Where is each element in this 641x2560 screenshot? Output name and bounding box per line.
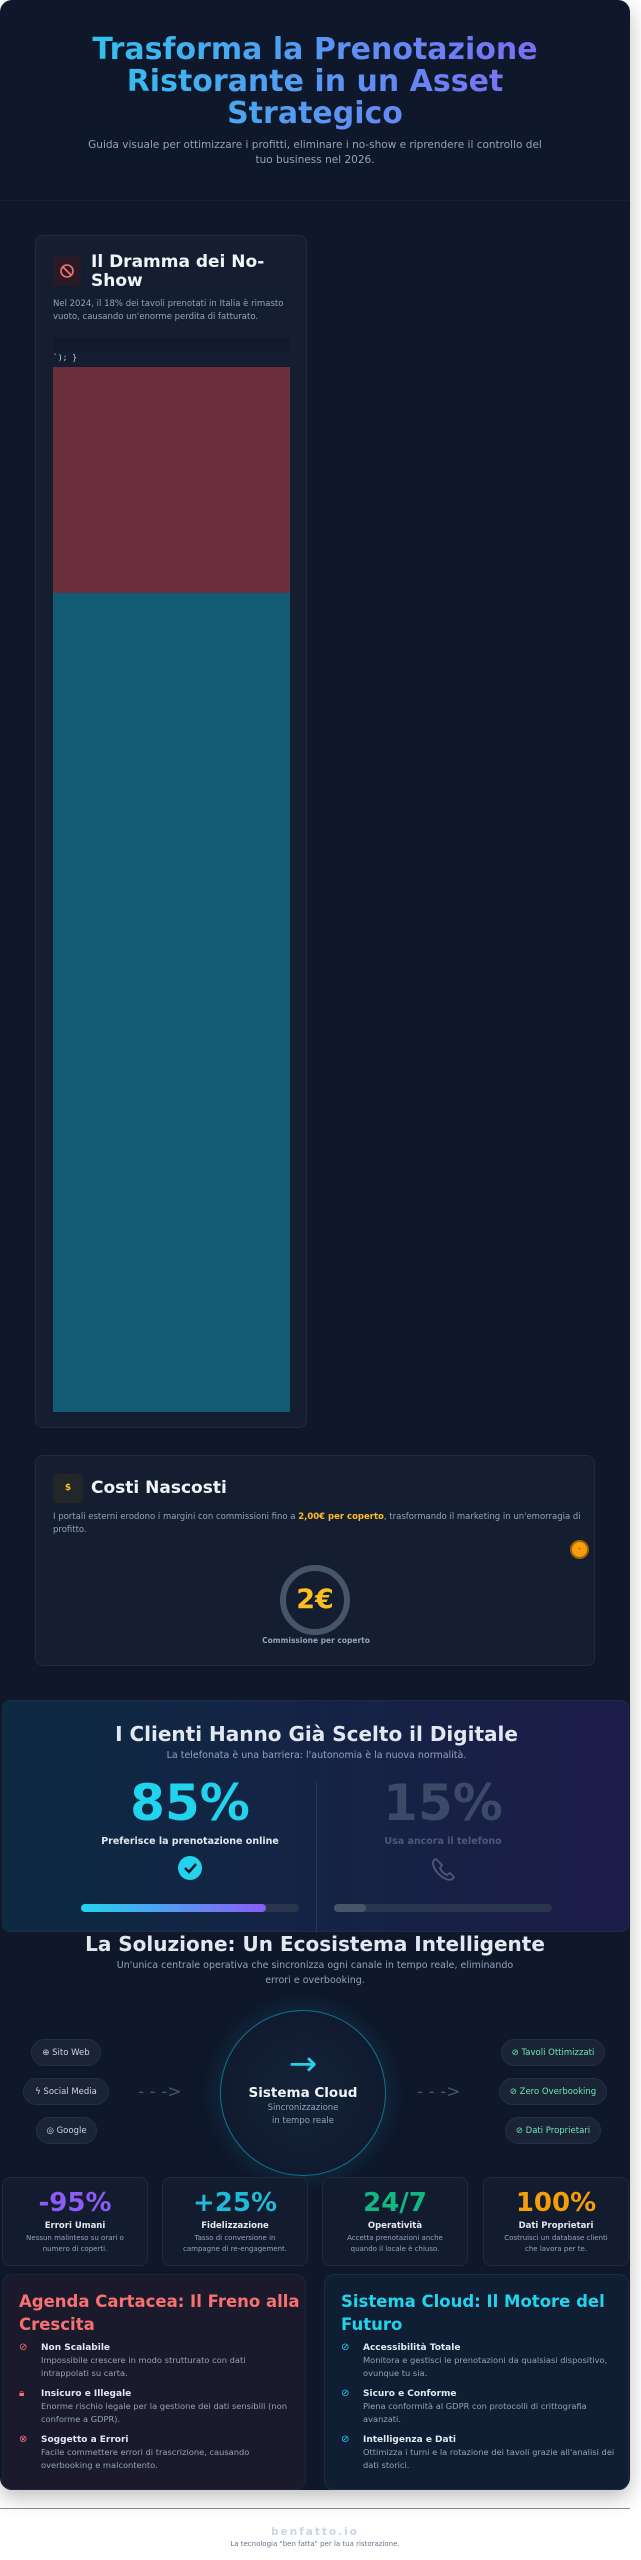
- panel: no-show: [35, 235, 307, 1428]
- stat cards: Nessun malinteso su orari o: [26, 2234, 124, 2242]
- panel: agenda cartacea: [2, 2274, 306, 2490]
- panel: costi nascosti: [35, 1455, 595, 1666]
- central hub: sistema cloud: Sistema Cloud: [249, 2085, 357, 2101]
- title: Ristorante in un Asset: [127, 64, 503, 99]
- panel: agenda cartacea: Non Scalabile: [41, 2343, 110, 2353]
- caption: Commissione per coperto: [262, 1636, 370, 1645]
- panel: sistema cloud: Ottimizza i turni e la rotazione dei tavoli grazie all'analisi dei dati storici.: [363, 2447, 614, 2470]
- footer: benfatto.io: [271, 2526, 359, 2538]
- main card background: Un'unica centrale operativa che sincronizza ogni canale in tempo reale, eliminando errori e overbooking.: [117, 1960, 513, 1986]
- title: Trasforma la Prenotazione: [92, 32, 538, 67]
- output pills: ⊘ Dati Proprietari: [516, 2126, 590, 2136]
- stat cards: Costruisci un database clienti: [504, 2234, 608, 2242]
- heading: I Clienti Hanno Già Scelto il Digitale: [115, 1722, 518, 1746]
- stat 15%: [383, 1774, 503, 1881]
- heading: solution: La Soluzione: Un Ecosistema Intelligente: [85, 1932, 545, 1956]
- section: clients digital: [2, 1700, 629, 1932]
- panel: sistema cloud: ⊘: [341, 2342, 349, 2353]
- text: I portali esterni erodono i margini con commissioni fino a 2,00€ per coperto, trasformando il marketing in un'emorragia di profitto.: [53, 1512, 581, 1535]
- commission ring: 2€: [296, 1584, 334, 1615]
- stat cards: 100%: [516, 2188, 596, 2218]
- panel: sistema cloud: Monitora e gestisci le prenotazioni da qualsiasi dispositivo, ovunque tu sia.: [363, 2355, 607, 2378]
- icon: check: [178, 1856, 202, 1880]
- stat 15%: 15%: [383, 1774, 503, 1832]
- output pills: [499, 2039, 607, 2144]
- text: Nel 2024, il 18% dei tavoli prenotati in Italia è rimasto vuoto, causando un'enorme perdita di fatturato.: [53, 299, 283, 322]
- stat cards: -95%: [38, 2188, 112, 2218]
- stat 85%: Preferisce la prenotazione online: [101, 1836, 279, 1847]
- panel: no-show: `); }: [53, 353, 77, 362]
- central hub: sistema cloud: →: [289, 2044, 317, 2084]
- icon: coin: -: [578, 1545, 581, 1553]
- output pills: ⊘ Tavoli Ottimizzati: [512, 2048, 594, 2058]
- icon: coin: [570, 1540, 589, 1559]
- stat 85%: 85%: [130, 1774, 250, 1832]
- central hub: sistema cloud: [220, 2010, 386, 2176]
- bar chart: [53, 367, 290, 1412]
- stat cards: Accetta prenotazioni anche: [347, 2234, 443, 2242]
- title: [0, 34, 630, 130]
- panel: sistema cloud: [324, 2274, 629, 2490]
- arrow right: - - ->: [417, 2082, 460, 2102]
- subtitle: Guida visuale per ottimizzare i profitti, eliminare i no-show e riprendere il controllo del tuo business nel 2026.: [88, 139, 542, 166]
- central hub: sistema cloud: in tempo reale: [272, 2116, 334, 2126]
- icon: phone: [432, 1858, 455, 1881]
- panel: agenda cartacea: Agenda Cartacea: Il Freno alla: [19, 2292, 300, 2311]
- heading: Il Dramma dei No-: [91, 252, 264, 272]
- input pills: ⊕ Sito Web: [42, 2048, 90, 2058]
- stat cards: 24/7: [363, 2188, 427, 2218]
- panel: agenda cartacea: Crescita: [19, 2315, 95, 2334]
- heading: Show: [91, 271, 143, 291]
- panel: agenda cartacea: Soggetto a Errori: [41, 2435, 129, 2445]
- panel: sistema cloud: Sistema Cloud: Il Motore del: [341, 2292, 605, 2311]
- central hub: sistema cloud: Sincronizzazione: [268, 2103, 338, 2113]
- stat cards: Tasso di conversione in: [195, 2234, 275, 2242]
- stat 15%: Usa ancora il telefono: [384, 1836, 502, 1847]
- footer: La tecnologia "ben fatta" per la tua ristorazione.: [230, 2540, 400, 2548]
- output pills: ⊘ Zero Overbooking: [510, 2086, 596, 2096]
- stat cards: +25%: [193, 2188, 277, 2218]
- panel: sistema cloud: Intelligenza e Dati: [363, 2435, 456, 2445]
- input pills: ◎ Google: [46, 2126, 87, 2136]
- stat cards: Fidelizzazione: [201, 2221, 269, 2231]
- panel: sistema cloud: Accessibilità Totale: [363, 2343, 460, 2353]
- panel: sistema cloud: Piena conformità al GDPR con protocolli di crittografia avanzati.: [363, 2401, 587, 2424]
- panel: agenda cartacea: Impossibile crescere in modo strutturato con dati intrappolati su carta.: [41, 2355, 246, 2378]
- stat cards: Dati Proprietari: [519, 2221, 593, 2231]
- panel: agenda cartacea: ⊘: [19, 2342, 27, 2353]
- title: Strategico: [227, 96, 403, 131]
- stat cards: campagne di re-engagement.: [183, 2245, 287, 2253]
- panel: agenda cartacea: Enorme rischio legale per la gestione dei dati sensibili (non conforme a GDPR).: [41, 2401, 287, 2424]
- stat cards: numero di coperti.: [43, 2245, 107, 2253]
- panel: sistema cloud: Sicuro e Conforme: [363, 2389, 457, 2399]
- panel: agenda cartacea: Facile commettere errori di trascrizione, causando overbooking e malcontento.: [41, 2447, 249, 2470]
- icon: ban: [53, 256, 81, 286]
- heading: Costi Nascosti: [91, 1478, 227, 1498]
- panel: sistema cloud: Futuro: [341, 2315, 402, 2334]
- input pills: [23, 2039, 109, 2144]
- panel: agenda cartacea: 🔒︎: [19, 2388, 24, 2399]
- panel: sistema cloud: ⊘: [341, 2388, 349, 2399]
- stat cards: Operatività: [368, 2221, 422, 2231]
- footer: [230, 2526, 400, 2548]
- stat cards: Errori Umani: [45, 2221, 105, 2231]
- section: clients digital: La telefonata è una barriera: l'autonomia è la nuova normalità.: [167, 1750, 466, 1761]
- stat cards: quando il locale è chiuso.: [351, 2245, 439, 2253]
- stat 85%: [101, 1774, 279, 1880]
- panel: agenda cartacea: Insicuro e Illegale: [41, 2389, 131, 2399]
- stat cards: [2, 2177, 629, 2266]
- arrow left: - - ->: [138, 2082, 181, 2102]
- icon: dollar: $: [65, 1483, 71, 1493]
- input pills: ϟ Social Media: [35, 2086, 97, 2096]
- panel: sistema cloud: ⊘: [341, 2434, 349, 2445]
- commission ring: [280, 1565, 350, 1635]
- progress bars: [81, 1904, 299, 1912]
- stat cards: che lavora per te.: [525, 2245, 587, 2253]
- panel: agenda cartacea: ⊗: [19, 2434, 27, 2445]
- icon: dollar: [53, 1474, 83, 1503]
- heading: [91, 252, 264, 291]
